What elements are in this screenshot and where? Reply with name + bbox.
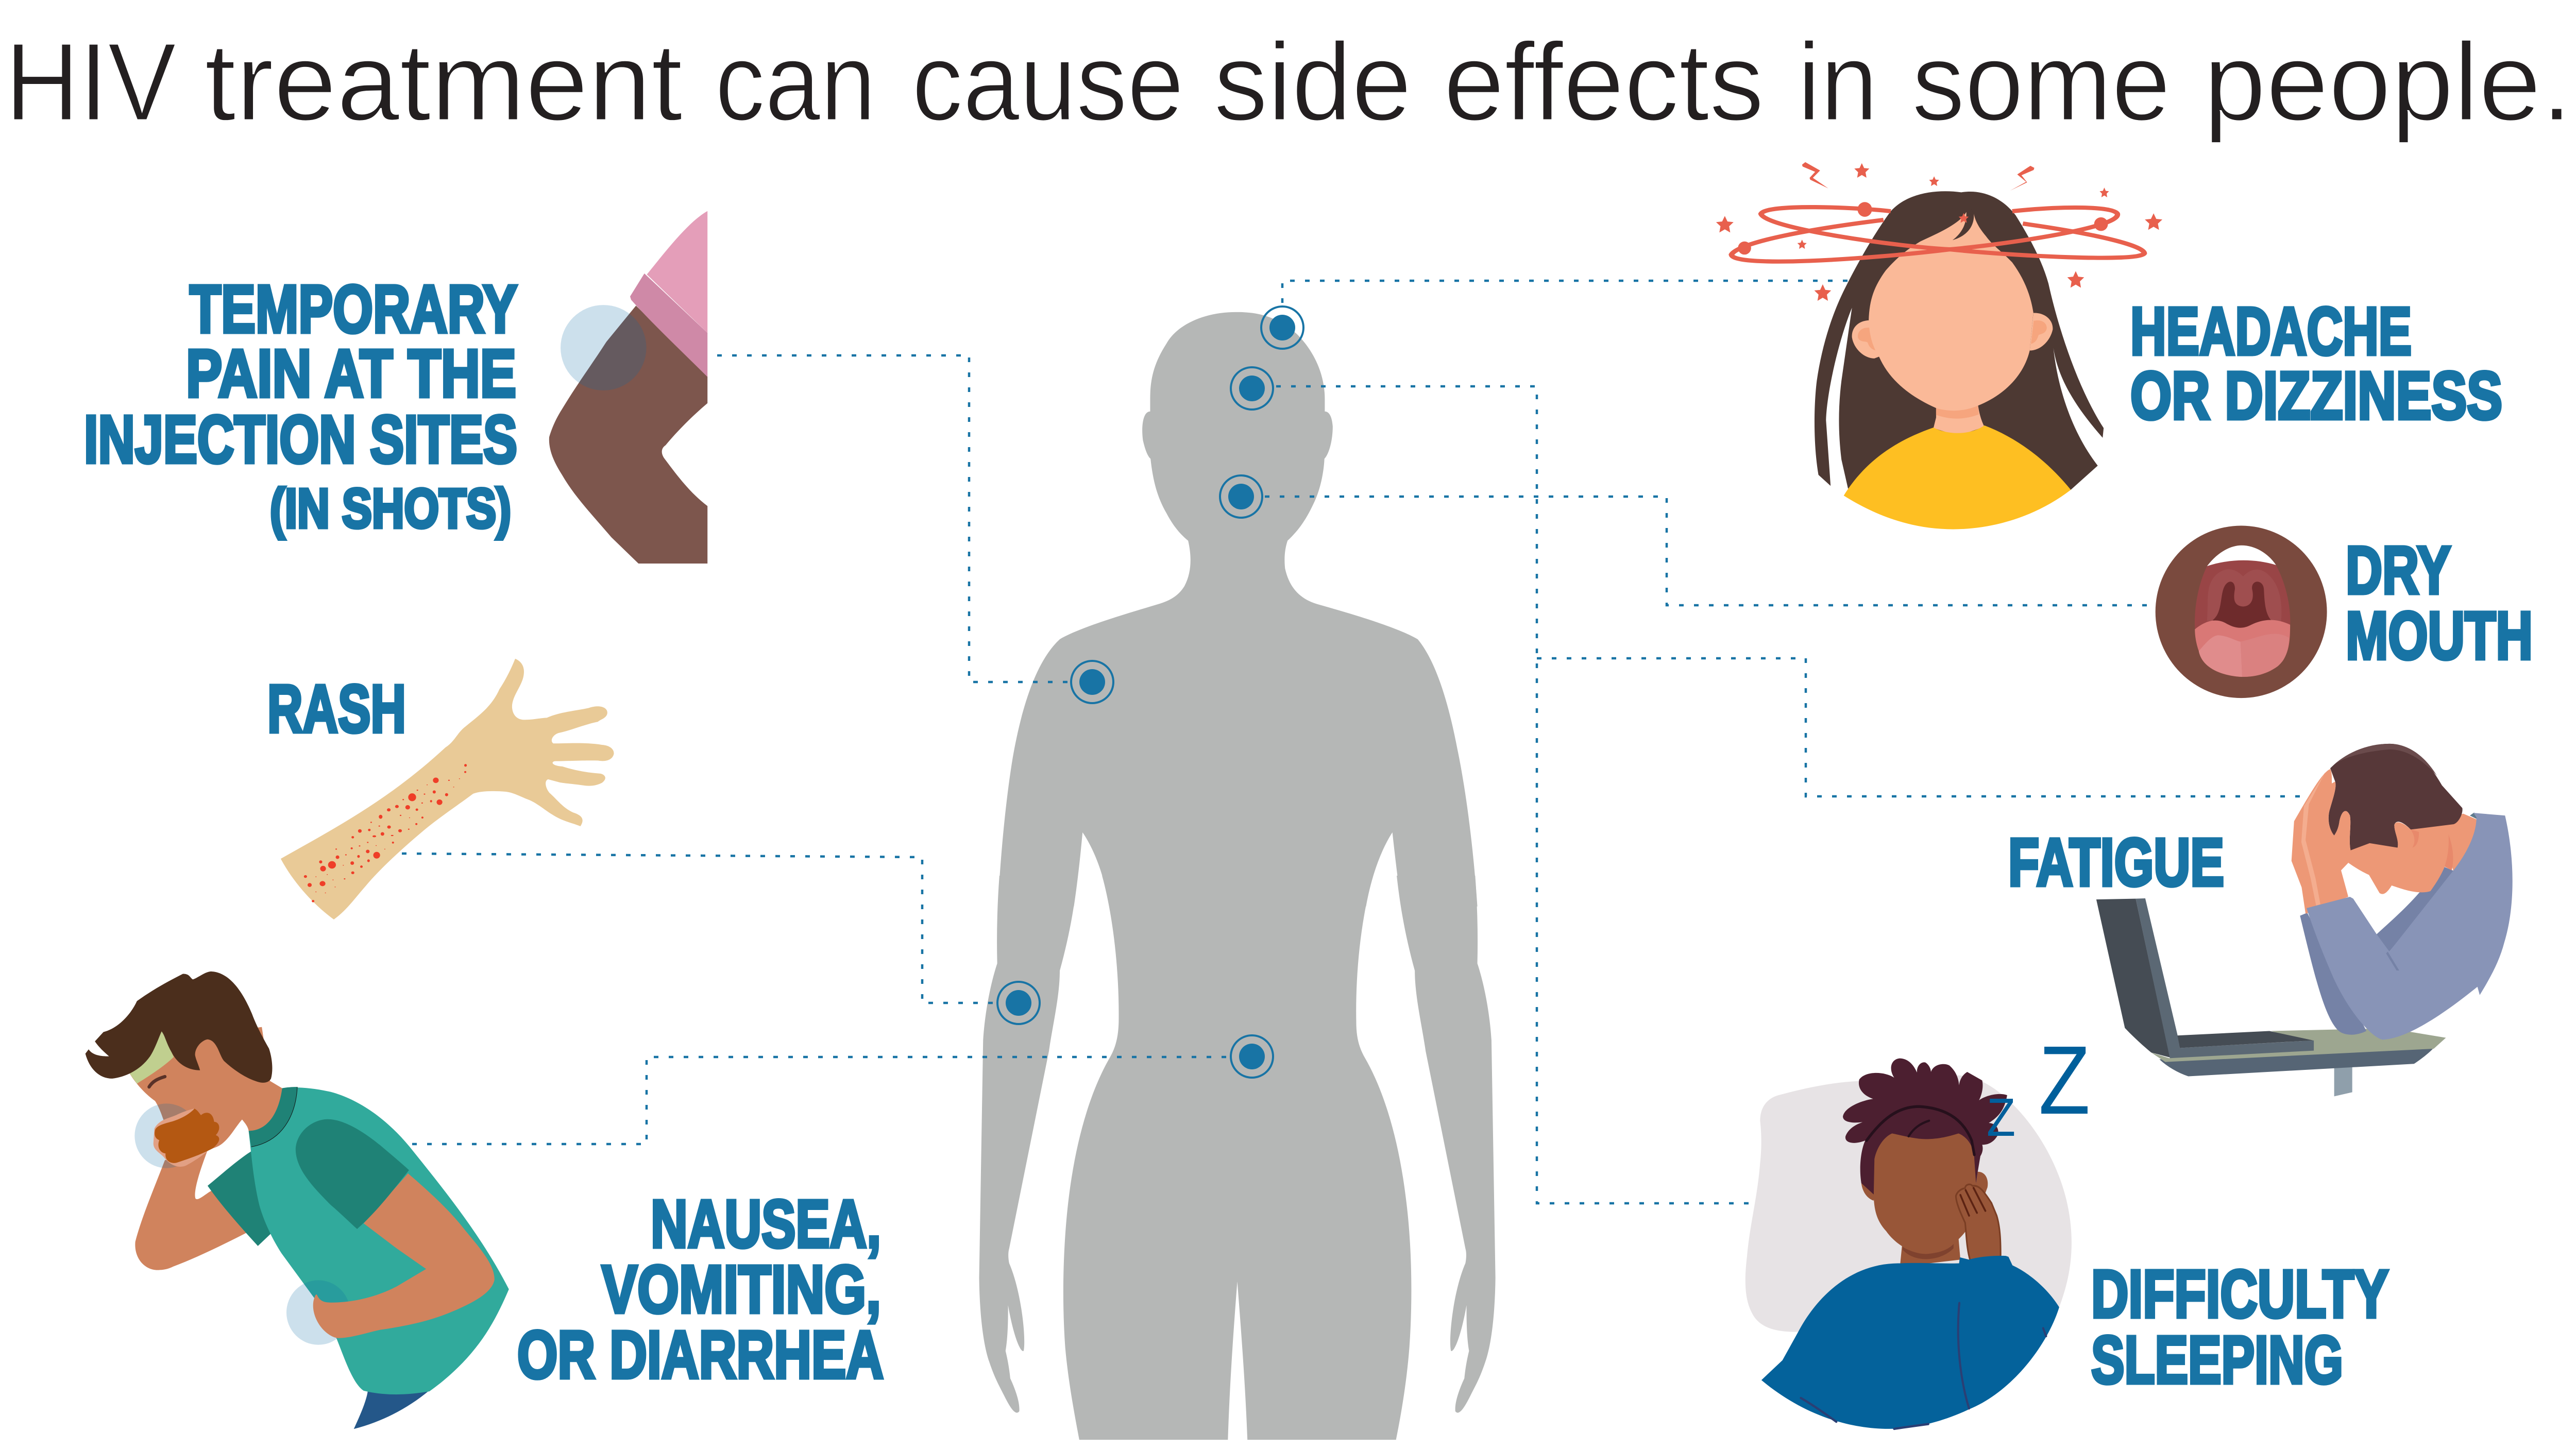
- title: treatment: [205, 20, 683, 144]
- heading: dry mouth: [2346, 532, 2533, 673]
- heading: difficulty sleeping: [2091, 1256, 2388, 1397]
- panel: difficulty sleeping: [1745, 1026, 2388, 1429]
- connector: nausea to abdomen marker: [412, 1057, 1230, 1144]
- icon: arm with rash: [281, 659, 614, 919]
- connector: branch to fatigue: [1537, 658, 2308, 796]
- heading: temporary pain at the injection sites: PAIN AT THE: [186, 335, 516, 411]
- icon: sleep letters: Z: [2039, 1026, 2090, 1135]
- title: side: [1214, 20, 1412, 144]
- marker: forehead: [1231, 367, 1273, 410]
- title: in: [1798, 20, 1878, 144]
- title: cause: [912, 20, 1184, 144]
- marker: arm: [997, 982, 1040, 1024]
- connector: rash to arm marker: [402, 854, 997, 1003]
- title: some: [1912, 20, 2171, 144]
- panel: injection site pain: [84, 211, 707, 564]
- marker: head: [1261, 306, 1303, 349]
- heading: temporary pain at the injection sites: INJECTION SITES: [84, 401, 517, 477]
- icon: sleep letters: Z: [1987, 1087, 2015, 1148]
- connector: head marker to headache illustration: [1282, 281, 1850, 303]
- panel: dry mouth: [2156, 526, 2533, 698]
- title: [5, 20, 2572, 144]
- heading: nausea, vomiting, or diarrhea: [517, 1186, 884, 1392]
- icon: arm with injection site: [549, 211, 707, 564]
- heading: fatigue: FATIGUE: [2008, 824, 2224, 900]
- icon: person unable to sleep: [1745, 1059, 2072, 1429]
- marker: shoulder: [1071, 661, 1113, 703]
- title: HIV: [5, 20, 176, 144]
- heading: temporary pain at the injection sites: TEMPORARY: [190, 271, 517, 347]
- heading: dry mouth: DRY: [2346, 532, 2451, 608]
- icon: man at laptop: [2096, 744, 2513, 1096]
- heading: difficulty sleeping: DIFFICULTY: [2091, 1256, 2388, 1332]
- title: effects: [1444, 20, 1764, 144]
- icon: open mouth: [2156, 526, 2327, 698]
- heading: nausea, vomiting, or diarrhea: NAUSEA,: [651, 1186, 881, 1262]
- human body silhouette: [979, 312, 1496, 1440]
- icon: man with nausea: [86, 971, 509, 1429]
- connector: forehead marker to difficulty sleeping: [1276, 386, 1762, 1203]
- connector: mouth marker to dry mouth: [1265, 497, 2156, 605]
- panel: headache or dizziness: [1716, 162, 2502, 529]
- title: people.: [2204, 20, 2572, 144]
- title: can: [715, 20, 876, 144]
- marker: mouth: [1220, 475, 1262, 518]
- panel: fatigue: [2008, 744, 2513, 1096]
- connector: injection site to shoulder marker: [717, 355, 1071, 682]
- icon: woman with dizziness: [1716, 162, 2162, 529]
- heading: temporary pain at the injection sites: [84, 271, 517, 539]
- marker: abdomen: [1231, 1035, 1273, 1078]
- panel: nausea, vomiting, or diarrhea: [86, 971, 884, 1429]
- heading: temporary pain at the injection sites: (IN SHOTS): [270, 477, 511, 539]
- icon: sleep letters: [1987, 1026, 2090, 1148]
- panel: rash: [267, 659, 614, 919]
- heading: headache or dizziness: [2130, 293, 2502, 433]
- heading: rash: RASH: [267, 671, 406, 746]
- heading: nausea, vomiting, or diarrhea: VOMITING,: [602, 1251, 881, 1327]
- heading: headache or dizziness: HEADACHE: [2130, 293, 2412, 369]
- heading: difficulty sleeping: SLEEPING: [2091, 1322, 2343, 1397]
- heading: nausea, vomiting, or diarrhea: OR DIARRHEA: [517, 1317, 884, 1392]
